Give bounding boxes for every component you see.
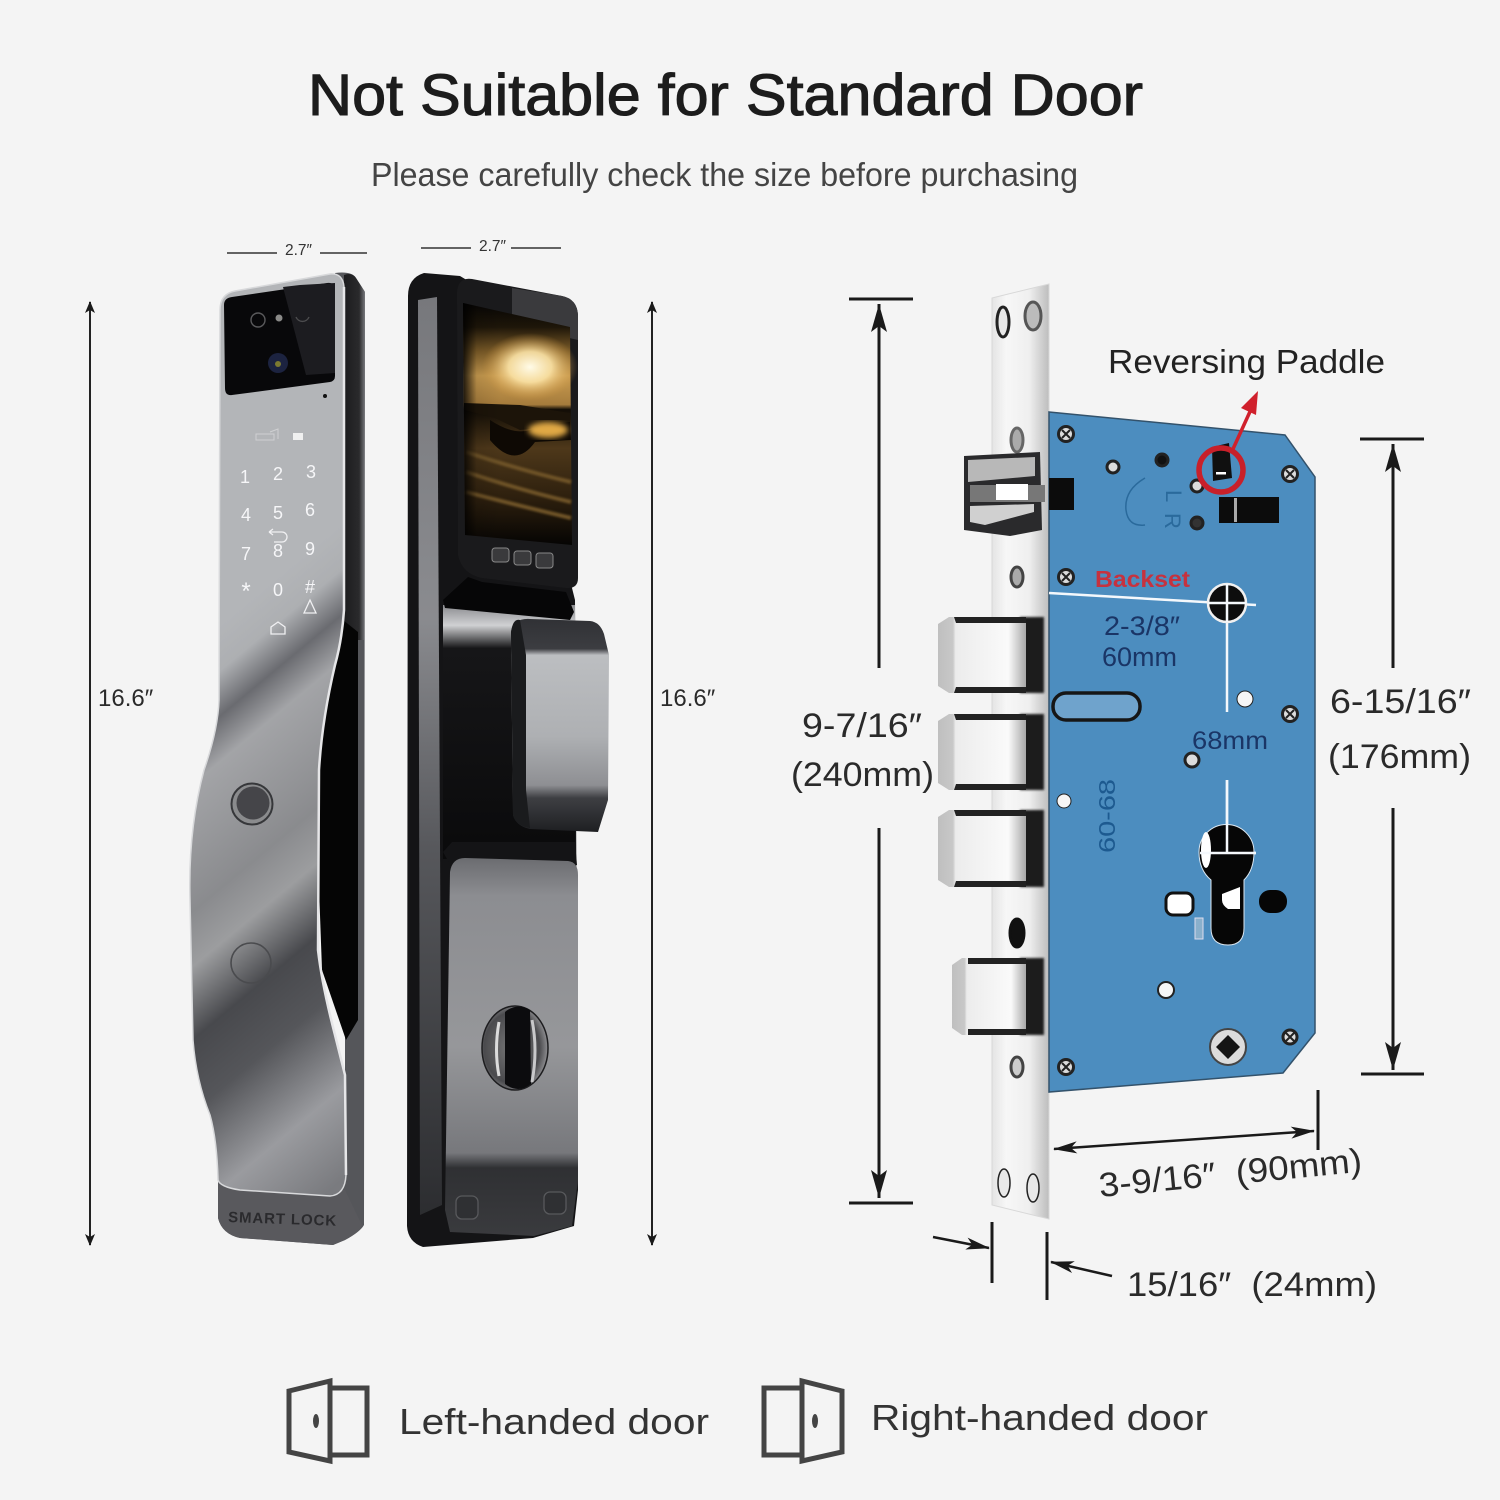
keypad: 1 <box>240 467 250 487</box>
main metal face panel <box>190 274 346 1196</box>
handing mark R L: R <box>1160 513 1185 529</box>
slot <box>1053 693 1140 720</box>
reversing paddle <box>1212 443 1232 481</box>
keypad <box>240 462 316 634</box>
deadbolt 3 <box>938 810 1044 887</box>
status icons <box>256 429 303 440</box>
front lock width dimension <box>227 242 367 259</box>
backset label: Backset <box>1095 566 1190 592</box>
faceplate height dimension: 9-7/16″ <box>802 707 922 745</box>
screw spacing dimension: (176mm) <box>1328 738 1471 776</box>
front lock height dimension: 16.6″ <box>98 685 154 712</box>
thumb turn knob <box>482 1006 548 1090</box>
red arrow <box>1233 391 1258 449</box>
lower plate <box>445 858 578 1236</box>
round button <box>231 943 271 983</box>
steel faceplate <box>992 284 1049 1219</box>
keypad: 6 <box>305 500 315 520</box>
rear screen unit <box>457 279 578 588</box>
backset dimension text: 2-3/8″ <box>1104 611 1180 641</box>
case slots <box>1049 478 1279 523</box>
faceplate width dimension <box>933 1222 1377 1304</box>
rear lock body <box>407 273 609 1247</box>
base with brand: SMART LOCK <box>228 1209 337 1230</box>
pull handle <box>511 619 609 832</box>
indicator dot <box>323 394 327 398</box>
vertical 60-68 text: 60-68 <box>1094 779 1120 853</box>
side rail <box>218 273 365 1245</box>
middle body <box>443 605 575 859</box>
rear lock width dimension <box>421 238 561 255</box>
plate feet <box>456 1192 566 1219</box>
dark upper rail <box>344 274 365 640</box>
deadbolt 2 <box>938 714 1044 790</box>
euro cylinder hole <box>1199 780 1256 945</box>
camera window <box>224 283 335 395</box>
grey side strip <box>418 297 442 1215</box>
sunset video picture <box>463 303 578 545</box>
keypad: 4 <box>241 505 251 525</box>
subtitle: Please carefully check the size before purchasing <box>371 156 1078 193</box>
keypad: 8 <box>273 541 283 561</box>
faceplate width dimension: 15/16″ (24mm) <box>1127 1266 1377 1304</box>
faceplate height dimension: (240mm) <box>791 756 934 794</box>
spindle <box>1210 1029 1246 1065</box>
rear lock width dimension: 2.7″ <box>479 238 507 255</box>
faceplate holes <box>997 302 1041 1202</box>
front lock width dimension: 2.7″ <box>285 242 313 259</box>
keypad: 9 <box>305 539 315 559</box>
base with brand <box>218 1182 362 1245</box>
black handle recess <box>318 620 358 1040</box>
right-handed door label: Right-handed door <box>871 1397 1208 1438</box>
outer back frame <box>407 273 578 1247</box>
center distance text: 68mm <box>1192 727 1268 755</box>
fingerprint sensor <box>232 784 272 824</box>
deadbolt 1 <box>938 617 1044 693</box>
lower plate surround <box>443 842 577 868</box>
backset dimension text <box>1102 611 1180 672</box>
icon: right-handed door <box>764 1381 842 1461</box>
icon: left-handed door <box>289 1381 367 1461</box>
screws <box>1057 426 1298 1074</box>
handing mark R L: L <box>1161 490 1186 502</box>
rear lock height dimension: 16.6″ <box>660 685 716 712</box>
backset dimension text: 60mm <box>1102 642 1177 672</box>
keypad: * <box>241 578 251 605</box>
deadbolt 4 <box>952 958 1044 1035</box>
backset measure lines <box>1049 593 1256 853</box>
title: Not Suitable for Standard Door <box>308 63 1143 128</box>
front lock body <box>190 273 365 1245</box>
mortise lock <box>938 284 1315 1219</box>
handing mark R L <box>1126 478 1186 529</box>
keypad: # <box>305 577 315 597</box>
spring latch <box>964 452 1045 536</box>
faceplate height dimension <box>791 299 934 1203</box>
reversing paddle label: Reversing Paddle <box>1108 343 1385 380</box>
small case openings <box>1166 890 1287 939</box>
blue case <box>1049 412 1315 1092</box>
left-handed door label: Left-handed door <box>399 1401 709 1442</box>
keypad: 5 <box>273 503 283 523</box>
keypad: 3 <box>306 462 316 482</box>
keypad: 7 <box>241 544 251 564</box>
red highlight circle <box>1199 448 1243 492</box>
screen buttons <box>492 548 553 568</box>
keypad: 2 <box>273 464 283 484</box>
case depth dimension <box>1054 1090 1364 1205</box>
keypad: 0 <box>273 580 283 600</box>
follower hole <box>1208 584 1246 622</box>
screw spacing dimension <box>1328 439 1471 1074</box>
hinge under screen <box>443 577 574 620</box>
case depth dimension: 3-9/16″ (90mm) <box>1097 1142 1364 1205</box>
screw spacing dimension: 6-15/16″ <box>1330 683 1471 721</box>
bright chrome edge <box>318 287 346 1175</box>
